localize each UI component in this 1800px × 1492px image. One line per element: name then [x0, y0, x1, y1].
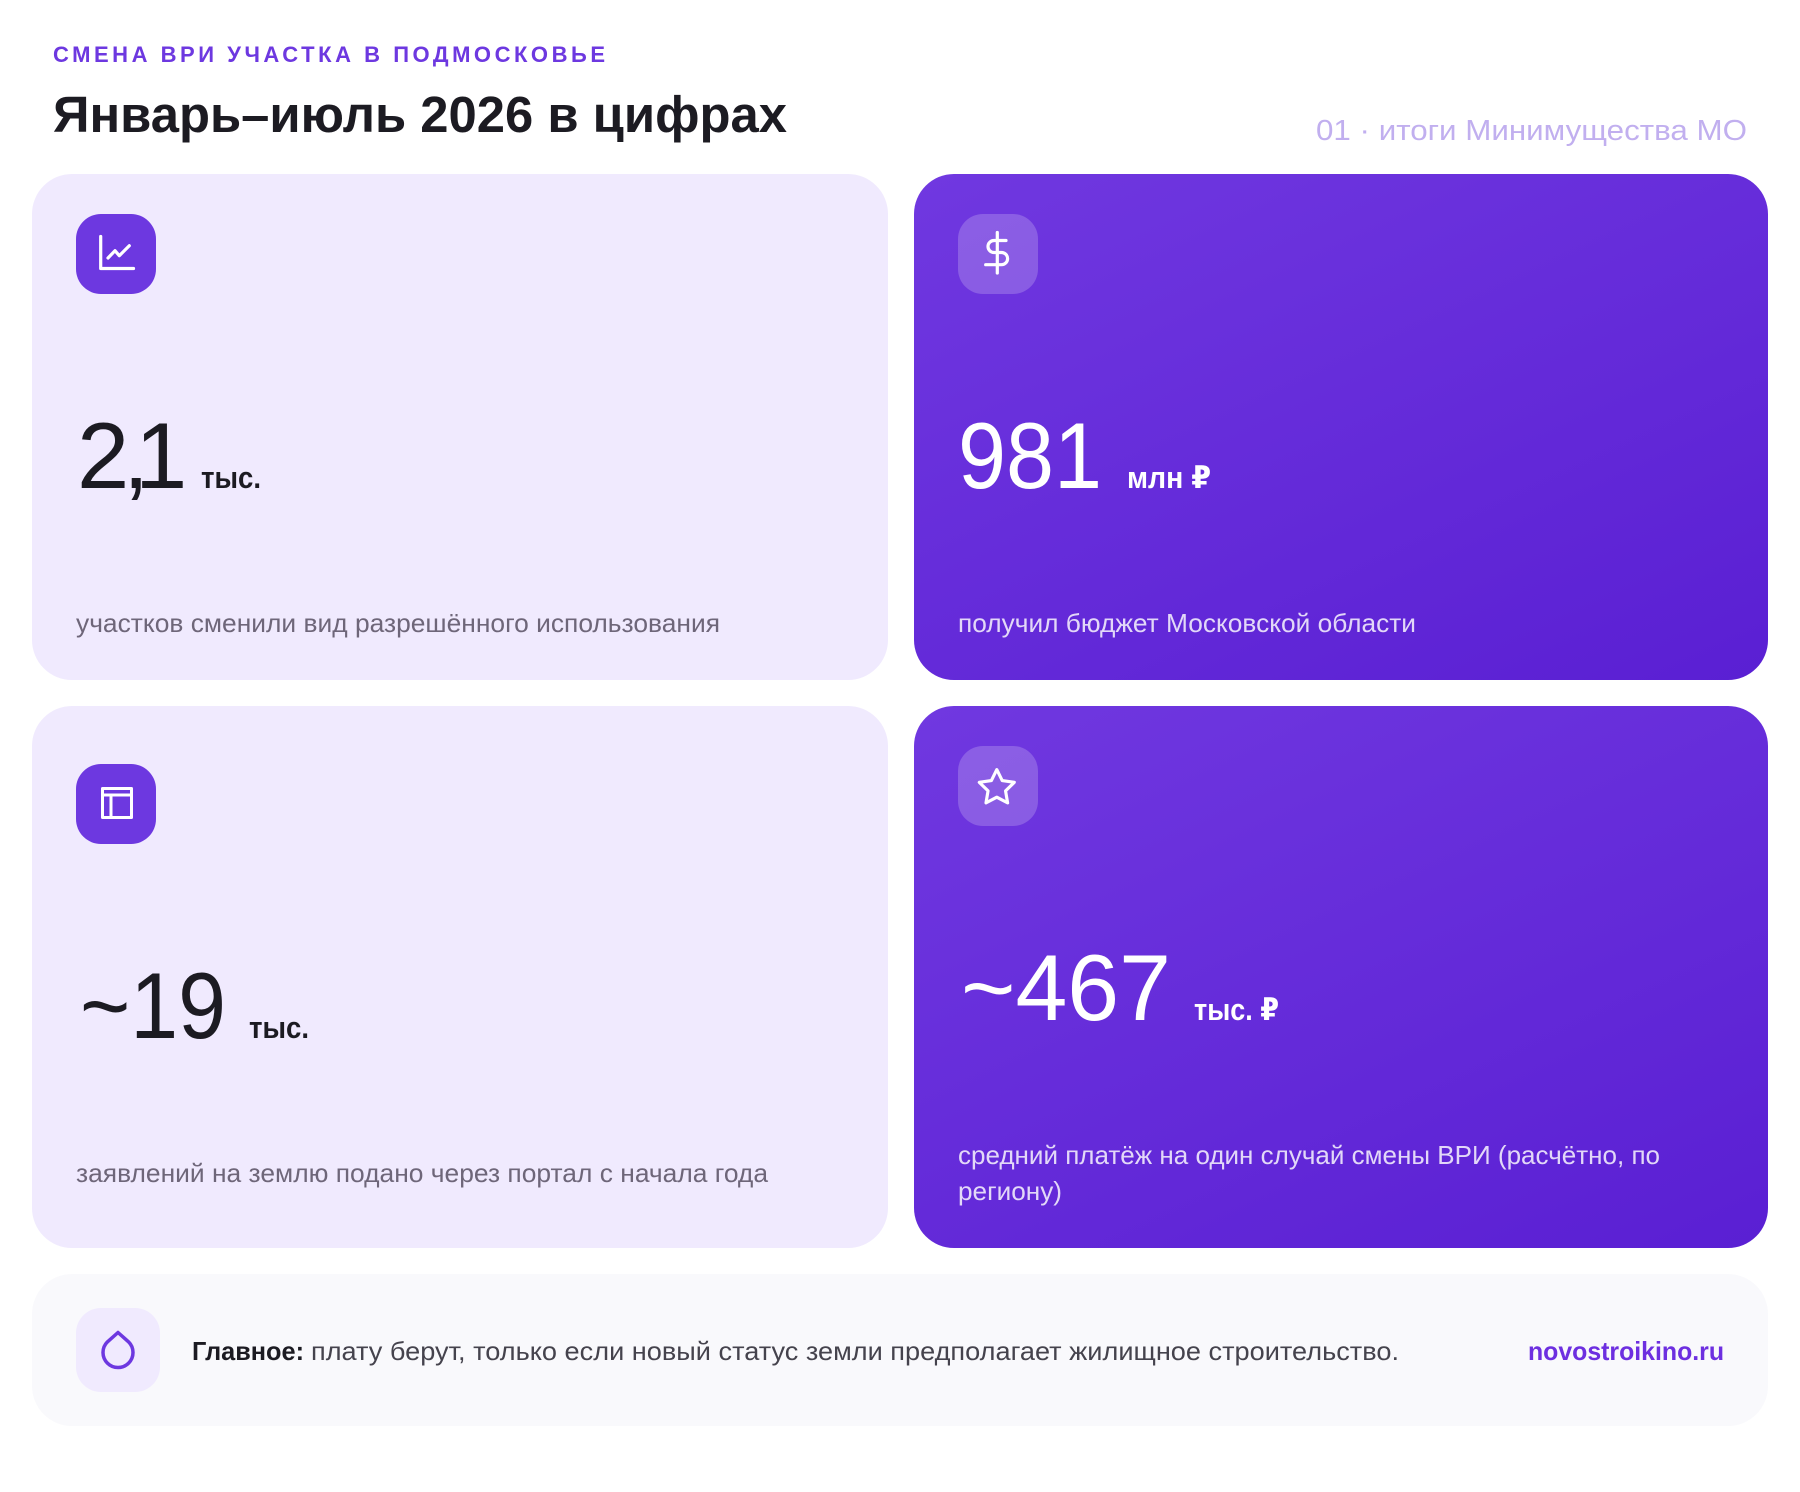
- value: ~467: [961, 935, 1171, 1040]
- description: средний платёж на один случай смены ВРИ (расчётно, по: [958, 1140, 1660, 1170]
- icon: line chart: [76, 214, 156, 294]
- icon: star: [958, 746, 1038, 826]
- source note: 01 · итоги Минимущества МО: [1316, 115, 1747, 147]
- value: 981: [958, 403, 1102, 508]
- unit: млн ₽: [1127, 460, 1211, 495]
- panel: budget: [914, 174, 1768, 680]
- unit: тыс. ₽: [1194, 992, 1279, 1027]
- icon: table: [76, 764, 156, 844]
- value: [77, 403, 187, 508]
- takeaway text: Главное:: [192, 1336, 304, 1366]
- takeaway text: плату берут, только если новый статус земли предполагает жилищное строительство.: [311, 1336, 1399, 1366]
- panel: average payment: [914, 706, 1768, 1248]
- description: региону): [958, 1176, 1062, 1206]
- unit: тыс.: [201, 460, 261, 495]
- icon: dollar: [958, 214, 1038, 294]
- title: Январь–июль 2026 в цифрах: [53, 86, 787, 143]
- panel: key takeaway: [32, 1274, 1768, 1426]
- description: участков сменили вид разрешённого использования: [76, 608, 720, 638]
- icon: drop: [76, 1308, 160, 1392]
- panel: applications: [32, 706, 888, 1248]
- description: [958, 1140, 1660, 1206]
- description: заявлений на землю подано через портал с начала года: [76, 1158, 769, 1188]
- brand link: novostroikino.ru: [1528, 1336, 1724, 1366]
- panel: plots changed: [32, 174, 888, 680]
- eyebrow: СМЕНА ВРИ УЧАСТКА В ПОДМОСКОВЬЕ: [53, 42, 605, 67]
- unit: тыс.: [249, 1010, 309, 1045]
- value: ,: [123, 403, 149, 508]
- description: получил бюджет Московской области: [958, 608, 1416, 638]
- value: 1: [135, 403, 187, 508]
- value: 2: [77, 403, 129, 508]
- value: ~19: [80, 953, 226, 1058]
